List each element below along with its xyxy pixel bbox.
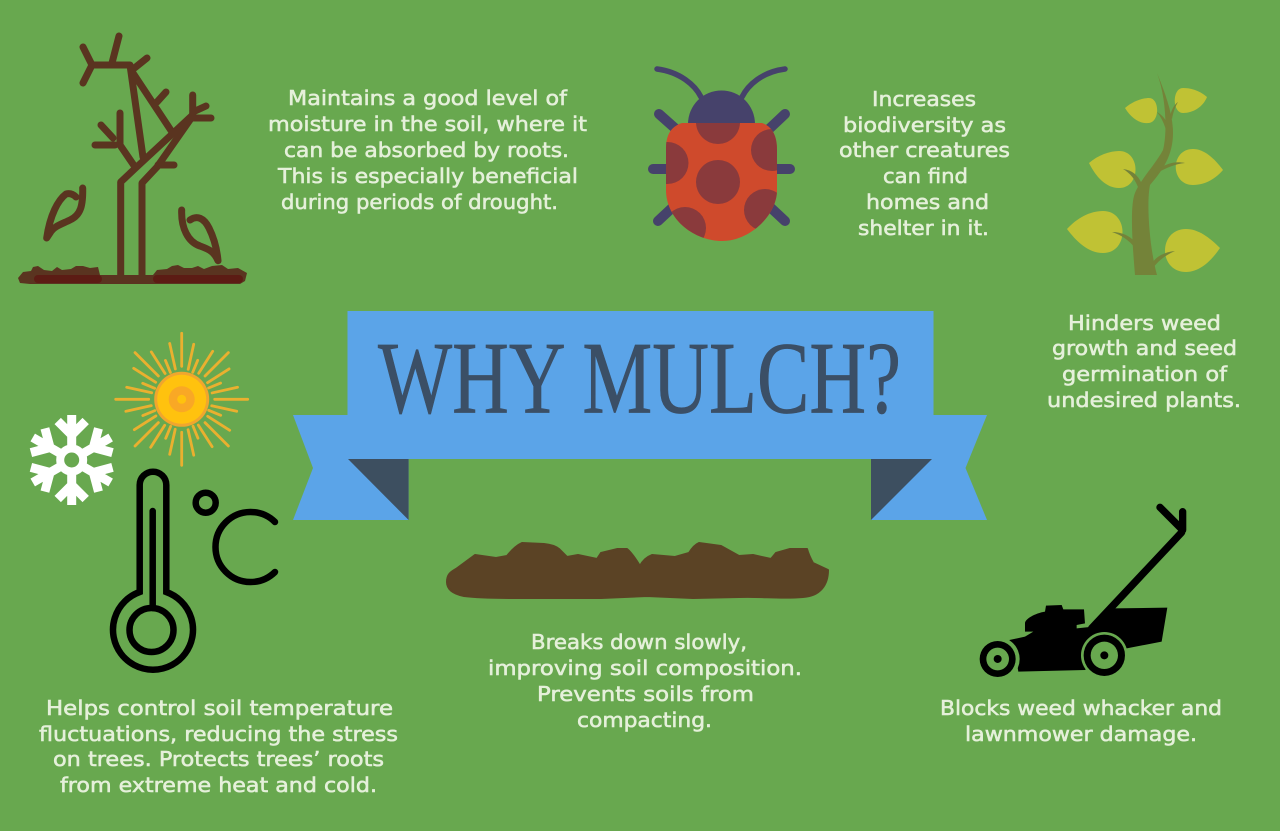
- title: WHY MULCH?: [378, 322, 901, 436]
- text: moisture: This is especially beneficial: [277, 164, 578, 188]
- text: soil composition: Prevents soils from: [537, 682, 754, 706]
- text: biodiversity: [839, 87, 1010, 240]
- text: biodiversity: other creatures: [839, 138, 1010, 162]
- text: temperature: fluctuations, reducing the stress: [39, 722, 398, 746]
- text: moisture: during periods of drought.: [281, 190, 558, 214]
- text: weeds: growth and seed: [1052, 336, 1237, 360]
- text: lawnmower damage: Blocks weed whacker and: [940, 696, 1222, 720]
- text: moisture: [268, 86, 587, 214]
- icon: green plant: [1067, 73, 1223, 275]
- text: weeds: [1047, 311, 1241, 412]
- text: biodiversity: shelter in it.: [858, 216, 989, 240]
- text: soil composition: Breaks down slowly,: [531, 630, 747, 654]
- text: lawnmower damage: [940, 696, 1222, 746]
- text: biodiversity: can find: [883, 164, 968, 188]
- text: weeds: Hinders weed: [1068, 311, 1221, 335]
- text: lawnmower damage: lawnmower damage.: [965, 722, 1197, 746]
- icon: mulch pile: [447, 543, 828, 598]
- text: soil composition: improving soil composition.: [488, 656, 802, 680]
- text: moisture: can be absorbed by roots.: [284, 138, 569, 162]
- text: temperature: from extreme heat and cold.: [60, 773, 377, 797]
- icon: snowflake: [26, 415, 118, 505]
- text: biodiversity: biodiversity as: [843, 113, 1006, 137]
- banner ribbon: [293, 311, 987, 520]
- icon: sun: [113, 331, 250, 468]
- text: weeds: germination of: [1062, 362, 1228, 386]
- text: weeds: undesired plants.: [1047, 388, 1241, 412]
- text: temperature: [39, 696, 398, 797]
- text: soil composition: compacting.: [577, 708, 712, 732]
- text: temperature: on trees. Protects trees’ roots: [53, 747, 384, 771]
- text: biodiversity: homes and: [866, 190, 989, 214]
- icon: bare tree with fallen leaves: [18, 36, 247, 284]
- text: moisture: moisture in the soil, where it: [268, 112, 587, 136]
- text: soil composition: [488, 630, 802, 732]
- text: moisture: Maintains a good level of: [288, 86, 568, 110]
- icon: ladybug: [646, 69, 793, 249]
- text: biodiversity: Increases: [872, 87, 976, 111]
- icon: lawnmower: [976, 507, 1183, 681]
- text: temperature: Helps control soil temperature: [46, 696, 393, 720]
- icon: thermometer with degrees celsius: [113, 472, 275, 670]
